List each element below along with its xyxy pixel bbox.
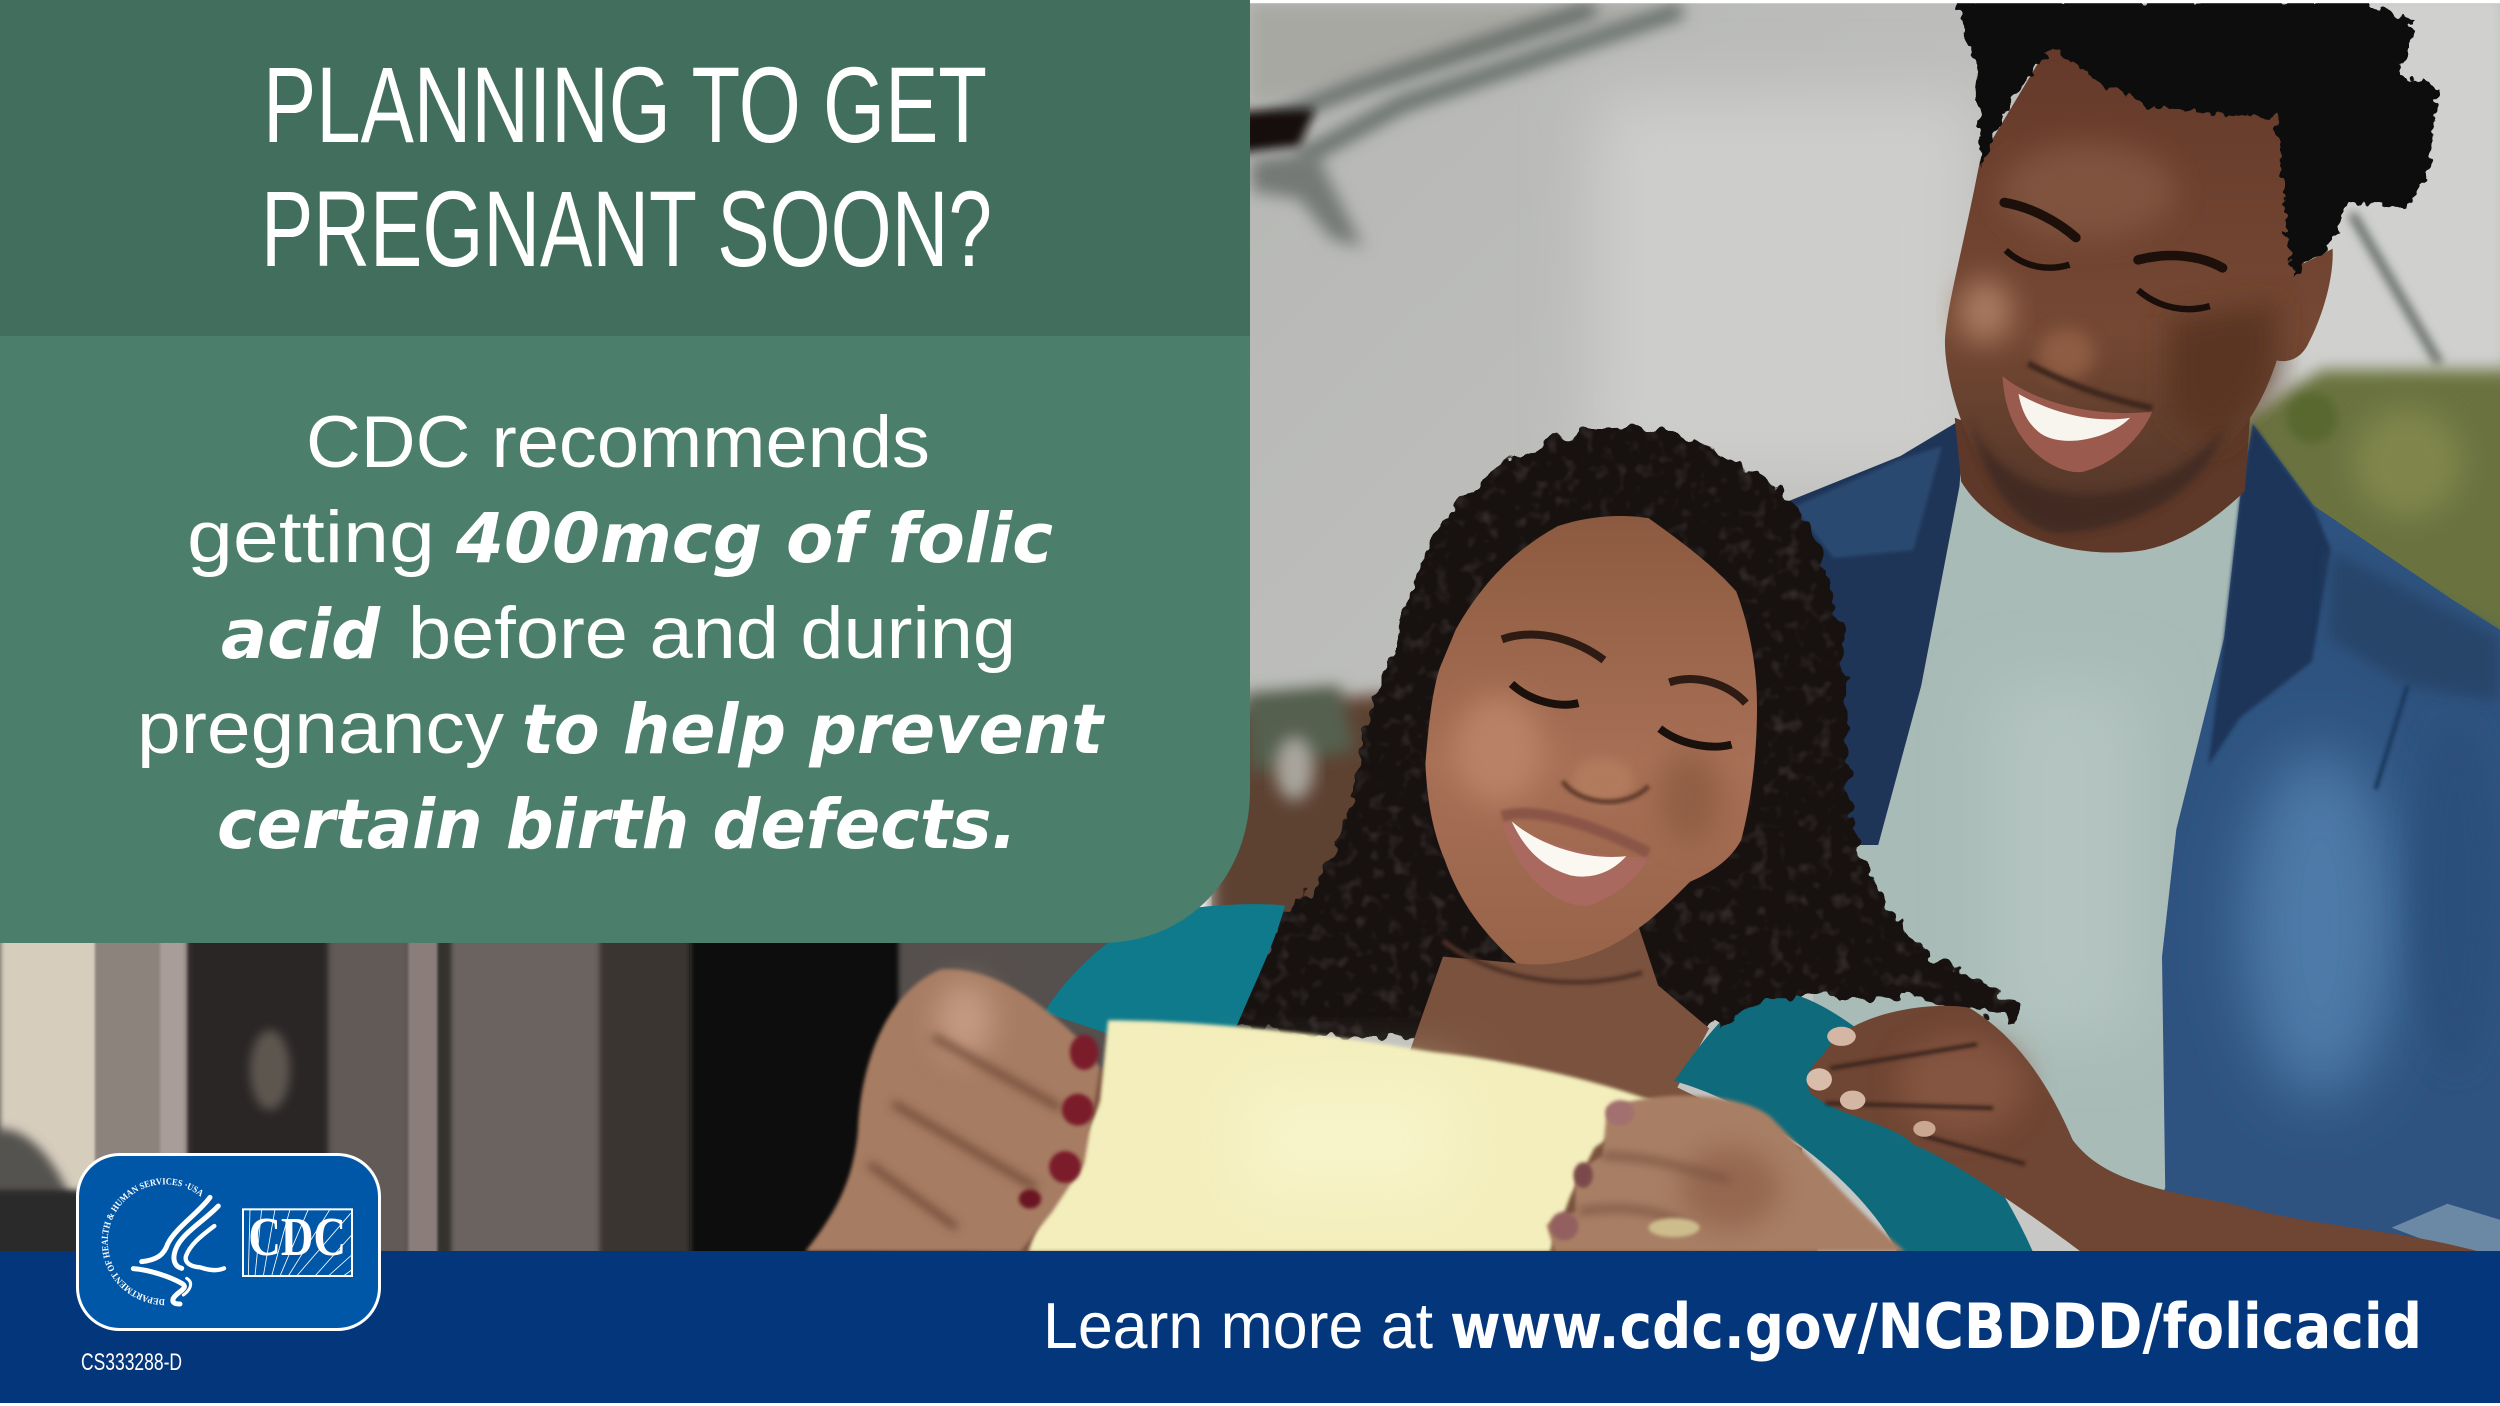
title [261,44,992,289]
text block: folic acid recommendation: pregnancy [137,688,505,769]
woman: neck and chest [1020,928,1818,1252]
woman: face [1425,516,1757,982]
publication code: CS333288-D [81,1349,182,1376]
footer bar [0,1251,2500,1403]
text block: folic acid recommendation: 400mcg of folic [455,499,1053,579]
icon: CDC sunburst box: CDC [248,1206,346,1267]
man: grey t-shirt [1802,478,2248,1212]
panel: recommendation background [0,336,1250,943]
photo background: blurred kitchen stripes beneath the panel [0,930,1300,1270]
man: hand on shoulder and forearm [1806,1006,2479,1252]
icon: HHS seal text ring: DEPARTMENT OF HEALTH & HUMAN SERVICES ·USA [102,1178,202,1306]
footer link text: Learn more at [1043,1289,1433,1362]
man: head and face [1945,32,2333,533]
paper held by the woman [1028,1020,1658,1252]
man: neck [1954,418,2250,552]
woman: right hand [1547,1096,1905,1252]
text block: folic acid recommendation [137,402,1106,865]
text block: folic acid recommendation: acid [221,595,381,675]
text block: folic acid recommendation: CDC recommends [306,402,930,483]
woman: left hand with red nails [805,969,1100,1252]
woman: hair strand over shoulder [1715,991,2020,1028]
photo background: blurred wall and ceiling [1212,0,2500,1252]
title: PREGNANT SOON? [261,168,992,289]
logo: HHS and CDC badge [76,1153,381,1331]
panel: heading background [0,0,1250,336]
man: denim shirt [1786,418,2500,1252]
text block: folic acid recommendation: certain birth defects. [217,785,1017,865]
woman: hair [1231,426,2018,1038]
text block: folic acid recommendation: to help prevent [522,690,1106,770]
icon: HHS eagle [133,1197,224,1304]
woman: teal top [1044,904,2033,1252]
man: hair [1955,0,2438,276]
text block: folic acid recommendation: before and during [408,593,1016,674]
footer link text [1043,1289,2422,1363]
text block: folic acid recommendation: getting [187,497,435,578]
title: PLANNING TO GET [263,44,987,165]
